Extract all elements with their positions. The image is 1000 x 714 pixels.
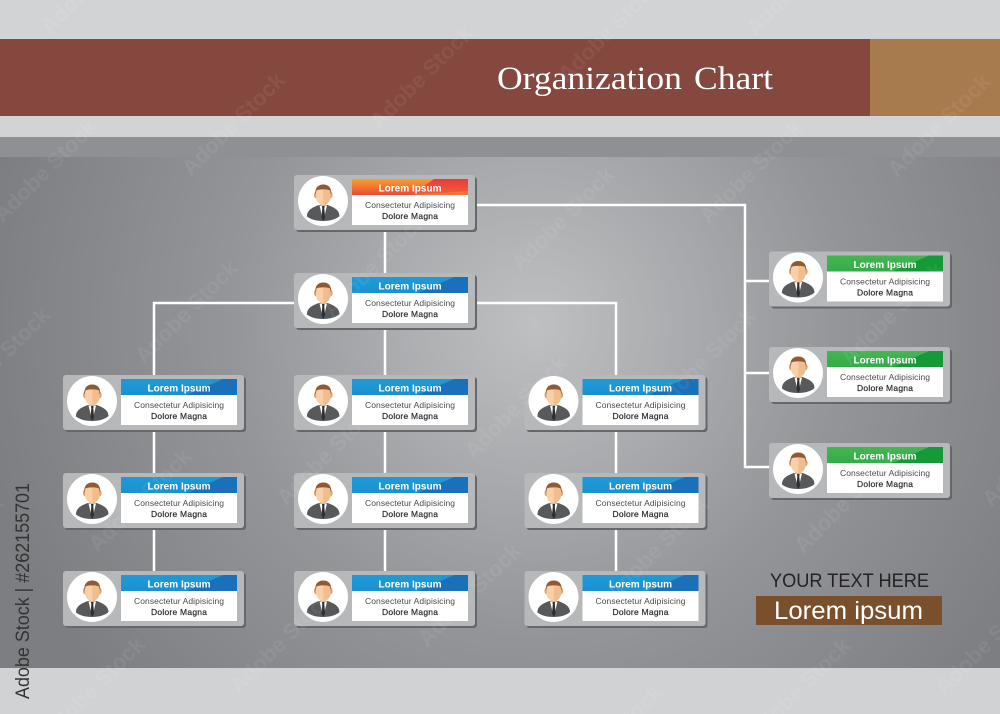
callout: lorem ipsum box: Lorem ipsum xyxy=(774,597,923,625)
card: centre column row 2: Consectetur Adipisicing xyxy=(365,498,455,508)
card: right column row 1: Consectetur Adipisicing xyxy=(596,400,686,410)
card: left column row 2: Dolore Magna xyxy=(151,509,207,519)
card: centre column row 1: Lorem Ipsum xyxy=(378,384,442,394)
card: green advisor 3: Lorem Ipsum xyxy=(854,452,917,462)
card: green advisor 3: Consectetur Adipisicing xyxy=(840,468,930,478)
card: left column row 3: Consectetur Adipisicing xyxy=(134,596,224,606)
card: right column row 1: Dolore Magna xyxy=(612,411,669,421)
card: left column row 3: Lorem Ipsum xyxy=(148,580,211,590)
card: second level: Consectetur Adipisicing xyxy=(365,298,455,308)
card: left column row 1 xyxy=(63,375,246,432)
dark band below header xyxy=(0,137,1000,157)
card: left column row 1: Lorem Ipsum xyxy=(148,384,211,394)
card: right column row 2: Lorem Ipsum xyxy=(609,482,672,492)
card: green advisor 2 xyxy=(769,347,952,404)
card: top executive: Consectetur Adipisicing xyxy=(365,200,455,210)
card: top executive: Dolore Magna xyxy=(382,211,438,221)
card: left column row 1: Consectetur Adipisicing xyxy=(134,400,224,410)
card: centre column row 3: Lorem Ipsum xyxy=(378,580,442,590)
card: second level: Lorem Ipsum xyxy=(378,282,442,292)
card: centre column row 1: Consectetur Adipisicing xyxy=(365,400,455,410)
card: green advisor 1: Dolore Magna xyxy=(857,288,913,298)
card: centre column row 1 xyxy=(294,375,477,432)
card: centre column row 2: Lorem Ipsum xyxy=(378,482,442,492)
card: right column row 3 xyxy=(524,571,708,628)
card: left column row 1: Dolore Magna xyxy=(151,411,207,421)
header banner xyxy=(0,39,1000,116)
card: left column row 2: Lorem Ipsum xyxy=(148,482,211,492)
card: second level xyxy=(294,273,477,330)
card: green advisor 2: Lorem Ipsum xyxy=(854,356,917,366)
card: centre column row 2 xyxy=(294,473,477,530)
card: centre column row 2: Dolore Magna xyxy=(382,509,438,519)
stock id vertical text: Adobe Stock | #262155701 xyxy=(13,483,34,699)
card: right column row 3: Dolore Magna xyxy=(612,607,669,617)
card: right column row 2: Dolore Magna xyxy=(612,509,669,519)
connector lines xyxy=(154,205,770,572)
footer band xyxy=(0,668,1000,714)
card: green advisor 2: Dolore Magna xyxy=(857,383,913,393)
card: green advisor 3 xyxy=(769,443,952,500)
card: centre column row 3 xyxy=(294,571,477,628)
card: right column row 2: Consectetur Adipisicing xyxy=(596,498,686,508)
card: right column row 1 xyxy=(524,375,708,432)
caption: your text here: YOUR TEXT HERE xyxy=(770,571,929,592)
card: right column row 1: Lorem Ipsum xyxy=(609,384,672,394)
card: top executive: Lorem Ipsum xyxy=(378,184,442,194)
card: left column row 3 xyxy=(63,571,246,628)
card: left column row 2: Consectetur Adipisicing xyxy=(134,498,224,508)
card: green advisor 1: Lorem Ipsum xyxy=(854,260,917,271)
card: right column row 3: Consectetur Adipisicing xyxy=(596,596,686,606)
card: green advisor 3: Dolore Magna xyxy=(857,479,913,489)
card: centre column row 1: Dolore Magna xyxy=(382,411,438,421)
card: centre column row 3: Consectetur Adipisicing xyxy=(365,596,455,606)
card: left column row 2 xyxy=(63,473,246,530)
card: second level: Dolore Magna xyxy=(382,309,438,319)
main chart panel xyxy=(0,157,1000,668)
card: green advisor 2: Consectetur Adipisicing xyxy=(840,372,930,382)
title: Organization Chart xyxy=(497,61,773,97)
card: green advisor 1: Consectetur Adipisicing xyxy=(840,276,930,286)
card: centre column row 3: Dolore Magna xyxy=(382,607,438,617)
card: left column row 3: Dolore Magna xyxy=(151,607,207,617)
card: right column row 3: Lorem Ipsum xyxy=(609,580,672,590)
card: green advisor 1 xyxy=(769,252,952,308)
card: right column row 2 xyxy=(524,473,708,530)
card: top executive xyxy=(294,175,477,232)
